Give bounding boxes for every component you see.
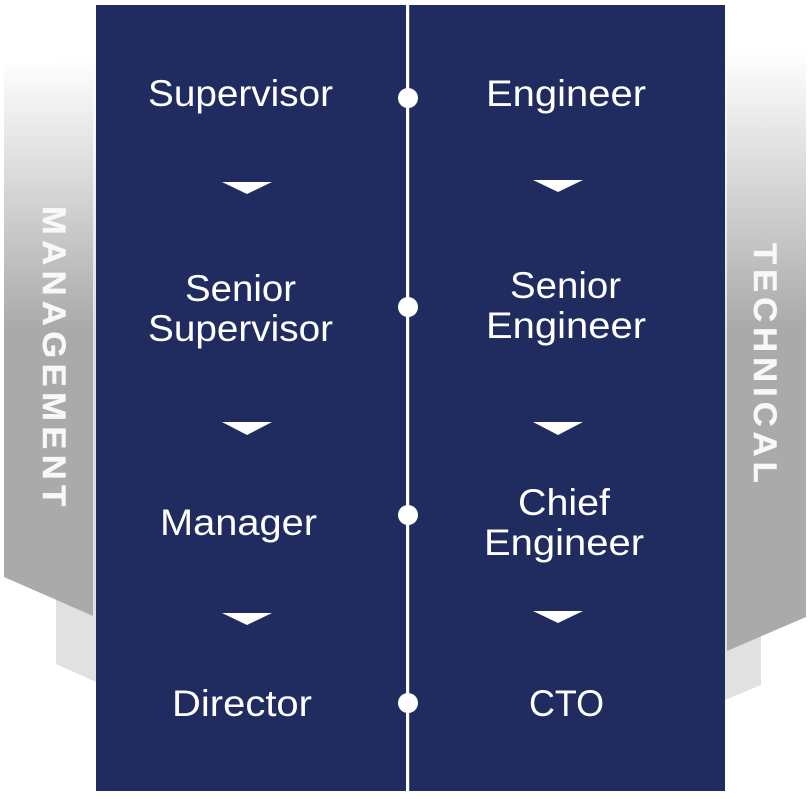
left column titles: Supervisor (148, 308, 333, 349)
right column titles: Engineer (486, 73, 646, 114)
right arrows (533, 180, 583, 623)
left column titles (148, 73, 333, 724)
panel: management ribbon (4, 50, 96, 682)
left arrows (222, 182, 272, 625)
left column titles: Senior (185, 268, 296, 309)
panel: technical ribbon (725, 50, 806, 700)
right column titles: Senior (510, 265, 621, 306)
label: technical: TECHNICAL (746, 243, 782, 483)
right column titles: CTO (529, 683, 604, 724)
right column titles: Engineer (484, 522, 644, 563)
panel: navy ladder background (96, 5, 725, 791)
label: management: MANAGEMENT (35, 206, 71, 506)
left column titles: Supervisor (148, 73, 333, 114)
left column titles: Director (172, 683, 312, 724)
node dots (398, 88, 418, 713)
left column titles: Manager (160, 502, 317, 543)
right column titles: Engineer (486, 305, 646, 346)
right column titles (484, 73, 646, 724)
right column titles: Chief (518, 482, 611, 523)
center divider line (406, 5, 409, 791)
